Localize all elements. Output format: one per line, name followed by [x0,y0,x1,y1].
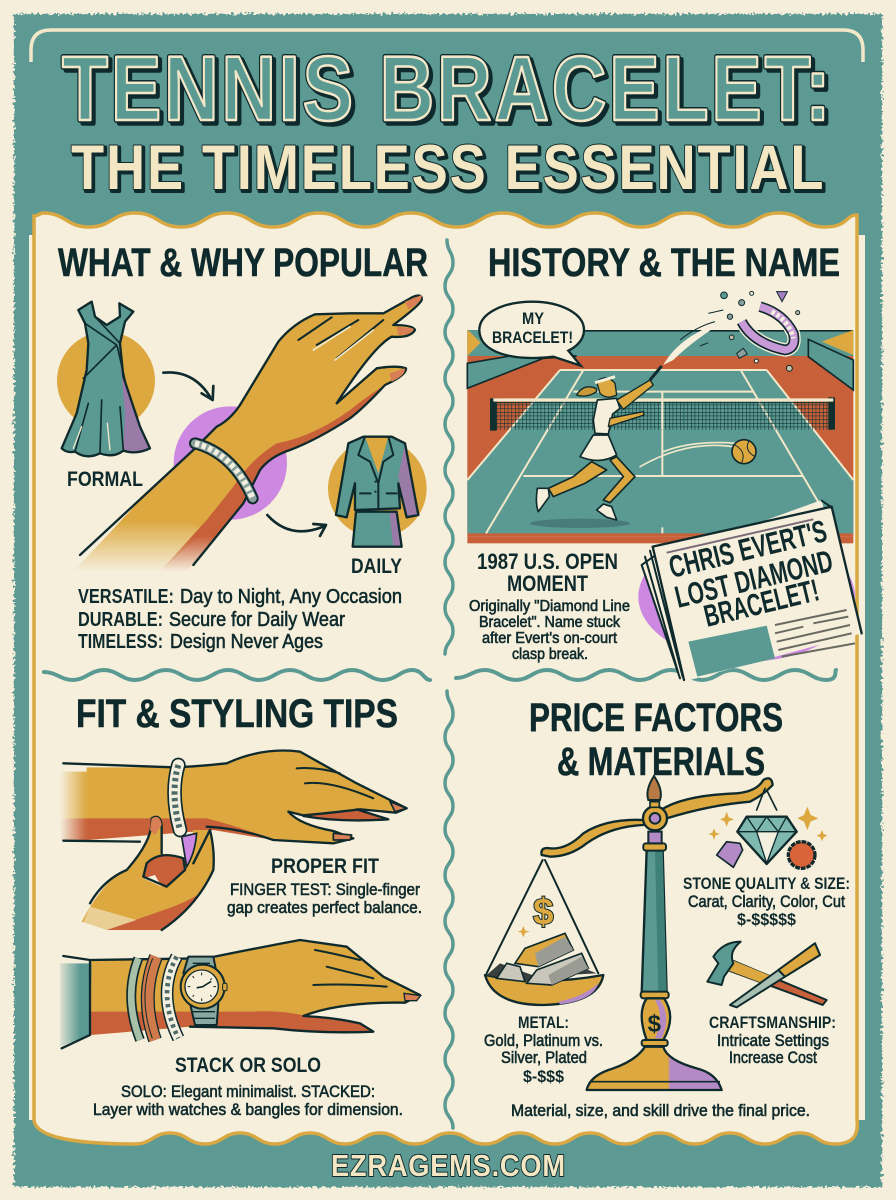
text block: stack or solo: STACK OR SOLO [175,1054,321,1077]
text block: proper fit [227,855,422,917]
tennis net [490,397,835,431]
text block: proper fit: FINGER TEST: Single-finger [230,880,420,899]
panel: history and the name [467,241,862,680]
arrow: bracelet to daily [267,515,326,536]
speech bubble text [492,309,573,347]
text block: stone quality: $-$$$$$ [737,910,797,929]
header inset line [31,30,863,62]
text block: benefits: TIMELESS: [78,631,163,653]
title line two: THE TIMELESS ESSENTIAL [73,135,825,205]
cream panel margin [29,235,865,1120]
heading: PRICE FACTORS [529,696,783,740]
vertical divider lower [445,691,453,1128]
text block: metal: Silver, Plated [501,1049,587,1067]
text block: 1987 U.S. Open moment: clasp break. [512,646,588,663]
icon: diamond bracelet [195,443,253,498]
vertical divider upper [445,240,453,654]
title line one: TENNIS BRACELET: [65,40,833,143]
text block: craftsmanship: Intricate Settings [717,1032,829,1050]
text block: stack or solo [93,1054,403,1119]
panel: price factors and materials [484,696,850,1120]
text block: craftsmanship [709,1013,836,1067]
text block: craftsmanship: CRAFTSMANSHIP: [709,1013,836,1032]
text block: stack or solo: Layer with watches & bangles for dimension. [93,1100,403,1119]
text block: benefits: DURABLE: [78,609,163,631]
text block: stone quality [683,874,850,929]
racket swoosh and broken bracelet [663,291,800,371]
text block: proper fit: PROPER FIT [271,855,379,878]
text block: metal: Gold, Platinum vs. [484,1032,603,1050]
text block: metal [484,1013,603,1086]
text block: 1987 U.S. Open moment: after Evert's on-court [482,630,618,647]
text block: 1987 U.S. Open moment: Originally "Diamond Line [469,598,630,615]
arrow: formal to bracelet [163,372,213,400]
text block: benefits: Secure for Daily Wear [169,609,345,631]
title line one: TENNIS BRACELET: [62,37,830,140]
text block: stone quality: STONE QUALITY & SIZE: [683,874,850,893]
title line one: TENNIS BRACELET: [62,37,830,140]
cream content panel [34,213,857,1144]
text block: 1987 U.S. Open moment: 1987 U.S. OPEN [477,549,618,574]
text block: stack or solo: SOLO: Elegant minimalist. STACKED: [121,1082,375,1101]
text block: stone quality: Carat, Clarity, Color, Cut [688,893,845,911]
court background [467,329,853,543]
illustration group [57,295,427,572]
heading: FIT & STYLING TIPS [76,692,398,736]
label: daily: DAILY [351,555,402,578]
text block: benefits: Day to Night, Any Occasion [180,586,402,608]
icon: balance scale [485,776,777,1090]
text block: metal: $-$$$ [523,1067,565,1086]
speech bubble shape [479,302,584,366]
label: formal: FORMAL [67,468,143,491]
speech bubble text: MY [522,309,545,328]
text block: proper fit: gap creates perfect balance. [227,898,422,917]
icon: hand with stacked bangles and watch [60,940,421,1048]
ball [640,440,756,467]
icon: arm and hand [73,295,422,572]
illustration: tennis court [467,291,855,662]
icon: bracelet on wrist [175,765,180,830]
icon: daily blazer and skirt [328,437,427,547]
title [62,37,833,205]
newspaper: BRACELET! [700,572,822,634]
heading [529,696,783,784]
icon: pinching hand [80,817,214,930]
purple shape behind newspaper [638,532,855,662]
player [530,366,662,528]
text block: metal: METAL: [518,1013,569,1032]
title line two: THE TIMELESS ESSENTIAL [71,133,823,203]
caption: Material, size, and skill drive the final price. [511,1101,810,1120]
text block: benefits: Design Never Ages [170,631,323,653]
icon: wristwatch [181,957,227,1025]
purple highlight circle [174,406,287,520]
text block: craftsmanship: Increase Cost [729,1049,817,1067]
icon: pedestal dollar: $ [648,1011,661,1038]
text block: 1987 U.S. Open moment: Bracelet". Name stuck [479,614,620,631]
footer url: EZRAGEMS.COM [331,1149,565,1183]
icon: dollar sign: $ [533,891,554,932]
heading: WHAT & WHY POPULAR [58,241,428,285]
text block: 1987 U.S. Open moment [469,549,630,663]
horizontal divider right [456,670,836,680]
horizontal divider left [44,670,430,680]
text block: 1987 U.S. Open moment: MOMENT [507,571,588,596]
icon: sparkle [517,926,530,937]
icon: gemstones and sparkles [708,807,827,868]
panel: fit and styling tips [60,692,422,1119]
icon: hand with bracelet fit [60,751,407,843]
icon: hammer and chisel [707,942,827,1007]
panel: what and why popular [57,241,428,653]
icon: gold and silver bars [487,933,597,985]
newspaper [642,500,862,680]
text block: benefits [78,586,402,653]
icon: formal dress [57,302,155,456]
heading: & MATERIALS [557,740,765,784]
speech bubble text: BRACELET! [492,328,573,347]
text block: benefits: VERSATILE: [78,586,174,608]
